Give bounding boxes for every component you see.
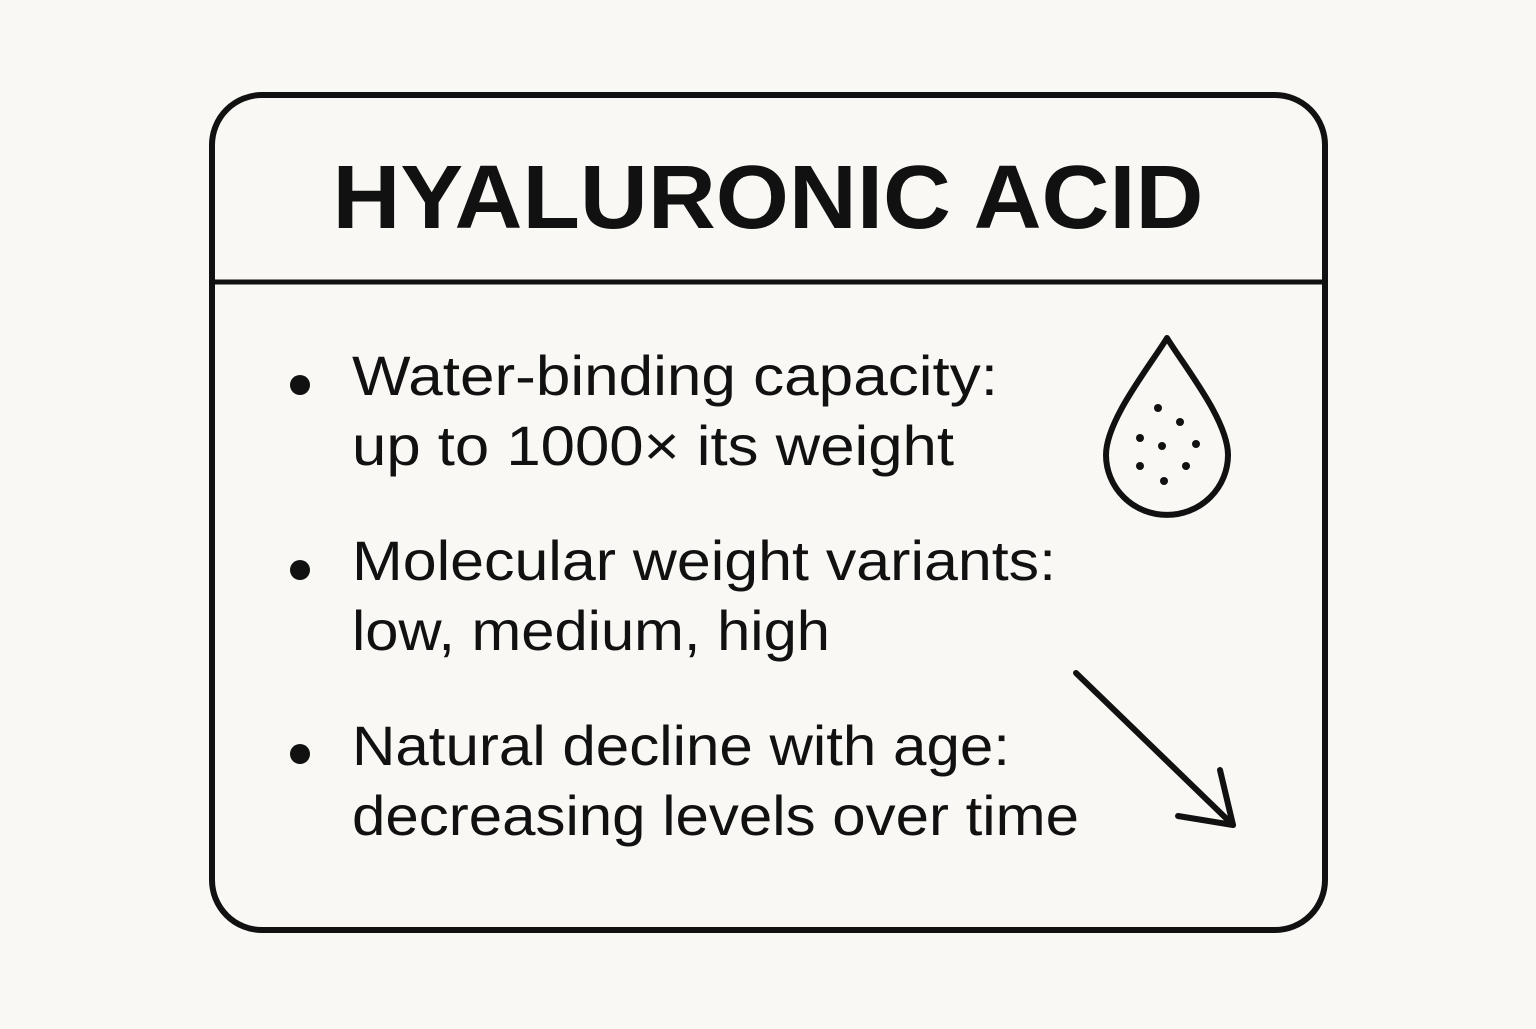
bullet: water-binding: up to 1000× its weight [352, 414, 954, 477]
bullet: natural decline: decreasing levels over time [352, 784, 1079, 847]
bullet: natural decline [290, 714, 1079, 847]
arrow: decline [1076, 673, 1233, 825]
bullet: water-binding [290, 344, 998, 477]
bullet: molecular weight [290, 529, 1056, 662]
icon: water drop [1106, 338, 1228, 515]
panel: main card [212, 95, 1325, 930]
bullet: molecular weight: low, medium, high [352, 599, 830, 662]
bullet: water-binding: Water-binding capacity: [352, 344, 998, 407]
title: HYALURONIC ACID [332, 148, 1204, 248]
bullet: natural decline: Natural decline with age: [352, 714, 1010, 777]
bullet: molecular weight: Molecular weight variants: [352, 529, 1056, 592]
